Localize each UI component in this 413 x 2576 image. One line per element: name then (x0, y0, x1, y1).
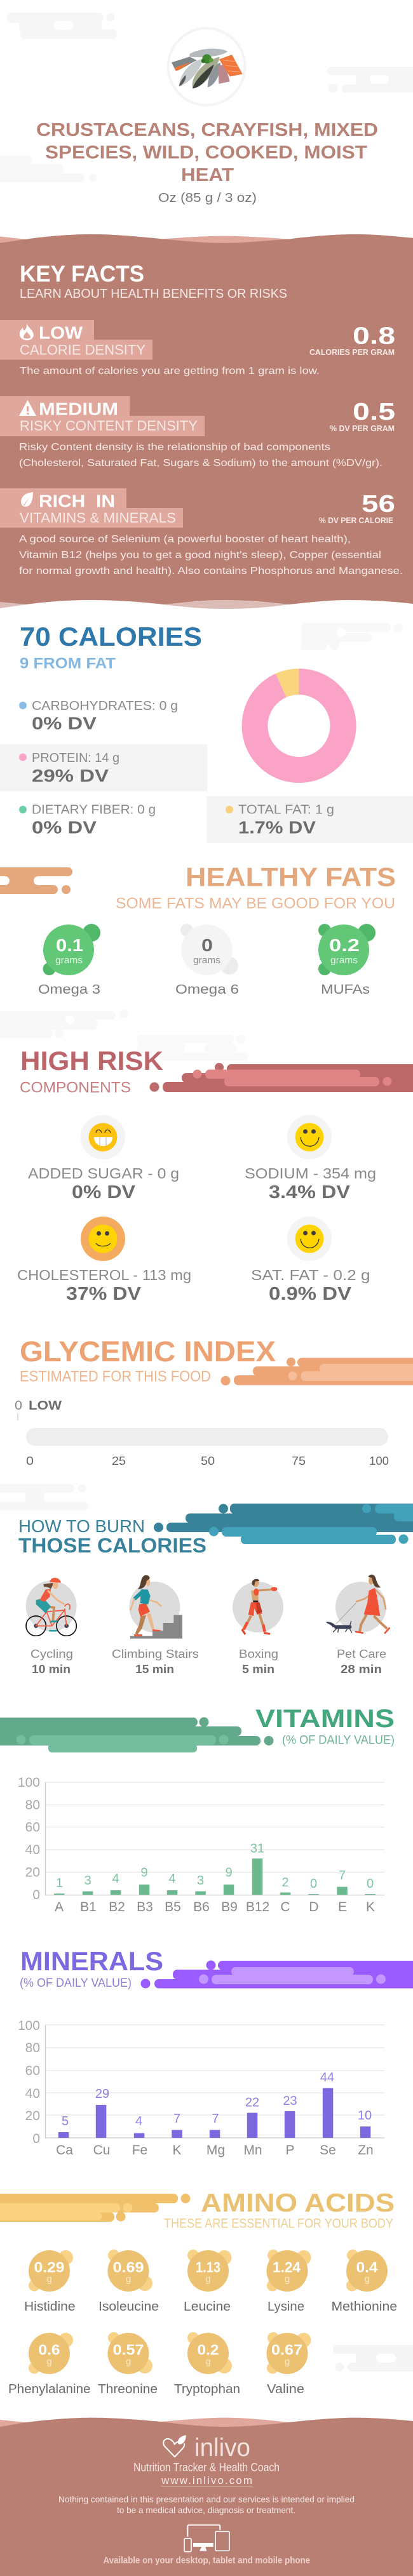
amino acid: tryptophan: g (205, 2356, 211, 2367)
bar chart: vitamins: 3 (197, 1874, 204, 1888)
risk: sodium (245, 1115, 376, 1203)
risk: cholesterol (17, 1217, 191, 1304)
amino acid: threonine (98, 2332, 158, 2396)
bar chart: minerals: P (285, 2143, 295, 2158)
fact: rich in vitamins and minerals (0, 488, 403, 577)
amino acid: threonine: g (126, 2356, 131, 2367)
subheading: vitamins: (% OF DAILY VALUE) (282, 1733, 395, 1747)
bar chart: vitamins: 4 (168, 1872, 176, 1886)
bar chart: minerals: Zn (358, 2143, 374, 2158)
decorative bars: vitamins (0, 1717, 273, 1752)
panel: key facts (0, 234, 413, 609)
macro: protein: PROTEIN: 14 g (32, 751, 119, 765)
amino acid: phenylalanine: Phenylalanine (8, 2382, 90, 2396)
amino acid: isoleucine: 0.69 (113, 2259, 144, 2276)
subheading: minerals: (% OF DAILY VALUE) (20, 1977, 132, 1990)
fact: risky content density: 0.5 (353, 399, 395, 425)
amino acid: tryptophan: Tryptophan (174, 2382, 240, 2396)
background cloud: burn (0, 1484, 88, 1511)
fat: omega 3: grams (55, 955, 83, 966)
bar chart: vitamins: B2 (109, 1900, 125, 1914)
macro: carbohydrates: CARBOHYDRATES: 0 g (32, 699, 178, 713)
logo: heart and leaf (163, 2435, 186, 2457)
background cloud: left of title (0, 156, 97, 182)
bar chart: vitamins (18, 1775, 384, 1914)
amino acid: leucine (184, 2250, 231, 2314)
amino acid: histidine: g (46, 2274, 52, 2285)
icon: dog walker (326, 1575, 389, 1633)
glycemic index gauge (15, 1399, 389, 1467)
activity: cycling (26, 1578, 77, 1676)
icon: boxer (233, 1579, 283, 1634)
bar chart: vitamins: 2 (281, 1876, 289, 1890)
subheading: components: COMPONENTS (20, 1079, 131, 1096)
risk: sodium: SODIUM - 354 mg (245, 1165, 376, 1182)
activity: climbing stairs (112, 1575, 199, 1676)
bar chart: minerals: Ca (56, 2143, 73, 2158)
risk: saturated fat: 0.9% DV (269, 1284, 352, 1304)
risk: cholesterol: 37% DV (66, 1284, 142, 1304)
bar chart: minerals: 22 (245, 2095, 259, 2109)
heading: those calories: THOSE CALORIES (18, 1534, 207, 1557)
bar chart: vitamins: 100 (18, 1775, 40, 1790)
bar chart: minerals: 60 (25, 2064, 40, 2078)
glycemic index gauge: 0 (15, 1399, 22, 1413)
macro: protein: 29% DV (32, 766, 109, 785)
icon: flame (20, 323, 34, 340)
bar chart: vitamins: C (280, 1900, 290, 1914)
title: SPECIES, WILD, COOKED, MOIST (45, 142, 367, 163)
bar chart: minerals: Cu (93, 2143, 110, 2158)
amino acid: isoleucine: g (126, 2274, 131, 2285)
website link: www.inlivo.com (161, 2474, 252, 2486)
macro: dietary fiber: 0% DV (32, 818, 97, 837)
amino acid: isoleucine: Isoleucine (98, 2300, 159, 2314)
macro: protein (0, 744, 207, 791)
title: CRUSTACEANS, CRAYFISH, MIXED (36, 120, 378, 140)
icon: warning triangle (19, 400, 36, 416)
risk: added sugar (28, 1115, 179, 1203)
amino acid: valine: 0.67 (271, 2342, 302, 2358)
glycemic index gauge: 75 (292, 1455, 306, 1467)
decorative bars: burn (154, 1504, 413, 1544)
fact: rich in vitamins and minerals: % DV PER CALORIE (319, 516, 393, 525)
macro: dietary fiber (19, 803, 156, 837)
risk: added sugar: ADDED SUGAR - 0 g (28, 1165, 179, 1182)
risk: sodium: 3.4% DV (269, 1182, 351, 1203)
bar chart: vitamins: 9 (140, 1865, 148, 1879)
amino acid: tryptophan (174, 2332, 240, 2396)
fat: MUFAs (318, 924, 376, 997)
risk: saturated fat (251, 1217, 370, 1304)
activity: pet care: 28 min (341, 1663, 382, 1676)
icon: leaf (21, 492, 33, 507)
fact: calorie density: 0.8 (353, 323, 395, 349)
fat: omega 6: Omega 6 (175, 982, 239, 997)
bar chart: minerals: 5 (62, 2114, 69, 2128)
macro: total fat (207, 796, 413, 843)
bar chart: minerals: 23 (283, 2094, 297, 2108)
glycemic index gauge: 50 (201, 1455, 215, 1467)
fact: risky content density: (Cholesterol, Saturated Fat, Sugars & Sodium) to the amount (%DV/gr). (19, 458, 383, 469)
bar chart: vitamins: 3 (84, 1874, 91, 1888)
amino acid: phenylalanine: g (46, 2356, 52, 2367)
icon: healthy fats bar (0, 867, 72, 894)
subheading: glycemic index: ESTIMATED FOR THIS FOOD (20, 1368, 211, 1385)
fat: MUFAs: grams (330, 955, 358, 966)
fact: risky content density: RISKY CONTENT DENSITY (20, 418, 198, 434)
bar chart: vitamins: 7 (339, 1869, 346, 1883)
serving size: Oz (85 g / 3 oz) (158, 191, 257, 205)
bar chart: vitamins: 9 (225, 1865, 233, 1879)
fact: calorie density: LOW (39, 323, 83, 343)
glycemic index gauge: 100 (369, 1455, 389, 1467)
icon: grinning face (89, 1123, 117, 1151)
bar chart: vitamins: 0 (310, 1877, 317, 1891)
disclaimer (58, 2494, 355, 2515)
bar chart: minerals: Mg (207, 2143, 225, 2158)
heading: amino acids: AMINO ACIDS (201, 2188, 395, 2217)
decorative bars: glycemic index (221, 1358, 413, 1385)
amino acid: lysine: 1.24 (273, 2259, 301, 2276)
bar chart: vitamins: A (55, 1900, 64, 1914)
decorative bars: amino acids (0, 2194, 191, 2222)
background cloud: top right (327, 67, 413, 93)
disclaimer: to be a medical advice, diagnosis or treatment. (117, 2505, 295, 2515)
risk: saturated fat: SAT. FAT - 0.2 g (251, 1267, 370, 1283)
subheading: key facts: LEARN ABOUT HEALTH BENEFITS OR RISKS (20, 287, 287, 301)
amino acid: lysine: g (285, 2274, 290, 2285)
icon: cyclist (26, 1578, 77, 1636)
bar chart: vitamins: 20 (25, 1865, 40, 1879)
activity: boxing: Boxing (239, 1648, 278, 1660)
activity: pet care: Pet Care (337, 1648, 386, 1660)
bar chart: vitamins: B9 (221, 1900, 238, 1914)
fact: rich in vitamins and minerals: VITAMINS & MINERALS (20, 510, 176, 526)
icon: smiling face (295, 1225, 323, 1253)
bar chart: vitamins: E (338, 1900, 347, 1914)
fat: omega 3 (38, 924, 100, 997)
icon: stair climber (129, 1575, 182, 1639)
bar chart: minerals (18, 2019, 384, 2158)
heading: healthy fats: HEALTHY FATS (186, 862, 396, 891)
icon: mild smile (89, 1225, 117, 1253)
bar chart: minerals: 7 (173, 2112, 180, 2126)
amino acid: threonine: Threonine (98, 2382, 158, 2396)
activity: cycling: Cycling (30, 1648, 73, 1660)
subheading: 9 from fat: 9 FROM FAT (20, 655, 116, 672)
amino acid: valine: g (285, 2356, 290, 2367)
macro: carbohydrates: 0% DV (32, 714, 97, 733)
heading: 70 calories: 70 CALORIES (20, 622, 202, 651)
bar chart: minerals: 10 (358, 2109, 372, 2123)
amino acid: methionine: g (364, 2274, 370, 2285)
fact: rich in vitamins and minerals: 56 (362, 491, 395, 517)
bar chart: vitamins: 1 (56, 1876, 63, 1890)
bar chart: vitamins: 31 (250, 1841, 264, 1855)
donut chart (242, 669, 356, 783)
fact: calorie density: CALORIES PER GRAM (309, 347, 395, 357)
amino acid: leucine: 1.13 (196, 2259, 220, 2276)
bar chart: minerals: 0 (32, 2132, 40, 2146)
title: HEAT (181, 165, 234, 185)
glycemic index gauge: 0 (26, 1455, 34, 1467)
amino acid: methionine (332, 2250, 397, 2314)
amino acid: phenylalanine: 0.6 (38, 2342, 60, 2358)
bar chart: minerals: 7 (212, 2112, 219, 2126)
fact: risky content density: Risky Content density is the relationship of bad components (19, 442, 330, 453)
amino acid: methionine: 0.4 (356, 2259, 378, 2276)
bar chart: vitamins: 0 (32, 1888, 40, 1902)
disclaimer: Nothing contained in this presentation and our services is intended or implied (58, 2494, 355, 2504)
activity: boxing (233, 1579, 283, 1676)
title (36, 120, 378, 185)
bar chart: vitamins: 60 (25, 1820, 40, 1835)
bar chart: vitamins: K (366, 1900, 375, 1914)
fact: calorie density (0, 320, 395, 377)
background cloud: amino acids (333, 2345, 413, 2372)
amino acid: histidine: Histidine (24, 2300, 75, 2314)
bar chart: vitamins: B12 (246, 1900, 269, 1914)
amino acid: valine: Valine (267, 2382, 304, 2396)
icon: desktop, tablet and phone (184, 2525, 229, 2552)
logo wordmark: inlivo (194, 2434, 250, 2462)
bar chart: minerals: 40 (25, 2086, 40, 2101)
bar chart: minerals: Fe (132, 2143, 147, 2158)
amino acid: lysine (267, 2250, 311, 2314)
fact: rich in vitamins and minerals: A good source of Selenium (a powerful booster of heart health), (19, 534, 351, 545)
fat: omega 3: Omega 3 (38, 982, 100, 997)
tagline: Nutrition Tracker & Health Coach (133, 2461, 280, 2474)
fat: MUFAs: 0.2 (329, 935, 360, 955)
decorative bars: high risk (150, 1063, 413, 1092)
decorative bars: minerals (141, 1961, 413, 1989)
risk: cholesterol: CHOLESTEROL - 113 mg (17, 1267, 191, 1283)
activity: climbing stairs: 15 min (135, 1663, 174, 1676)
fact: rich in vitamins and minerals: RICH IN (39, 491, 115, 511)
bar chart: minerals: 4 (135, 2114, 142, 2128)
bar chart: minerals: Se (320, 2143, 336, 2158)
amino acid: methionine: Methionine (332, 2300, 397, 2314)
fat: MUFAs: MUFAs (321, 982, 370, 997)
heading: vitamins: VITAMINS (255, 1705, 395, 1733)
glycemic index gauge: 25 (112, 1455, 126, 1467)
bar chart: minerals: 100 (18, 2019, 40, 2033)
macro: total fat: TOTAL FAT: 1 g (238, 803, 334, 817)
amino acid: isoleucine (98, 2250, 159, 2314)
bar chart: vitamins: 80 (25, 1798, 40, 1812)
amino acid: histidine (24, 2250, 75, 2314)
macro: carbohydrates (19, 699, 178, 733)
activity: climbing stairs: Climbing Stairs (112, 1648, 199, 1660)
panel: footer (0, 2418, 413, 2576)
availability note: Available on your desktop, tablet and mobile phone (103, 2555, 310, 2566)
subheading: healthy fats: SOME FATS MAY BE GOOD FOR YOU (116, 895, 395, 912)
bar chart: minerals: Mn (243, 2143, 262, 2158)
fact: rich in vitamins and minerals: Vitamin B12 (helps you to get a good night's sleep), Copper (essential (19, 550, 381, 561)
bar chart: minerals: 29 (95, 2087, 109, 2101)
glycemic index gauge: LOW (29, 1399, 62, 1413)
bar chart: vitamins: 4 (112, 1872, 119, 1886)
fact: risky content density (0, 396, 395, 469)
fact: calorie density: The amount of calories you are getting from 1 gram is low. (20, 366, 320, 377)
amino acid: threonine: 0.57 (113, 2342, 144, 2358)
bar chart: minerals: 44 (320, 2071, 334, 2085)
bar chart: vitamins: D (309, 1900, 319, 1914)
activity: boxing: 5 min (242, 1663, 274, 1676)
macro: dietary fiber: DIETARY FIBER: 0 g (32, 803, 156, 817)
bar chart: minerals: 80 (25, 2041, 40, 2055)
amino acid: histidine: 0.29 (34, 2259, 65, 2276)
fact: rich in vitamins and minerals: for normal growth and health). Also contains Phosphorus and Manganese. (19, 566, 403, 577)
background cloud: top left (7, 13, 117, 39)
bar chart: vitamins: B5 (165, 1900, 181, 1914)
fat: omega 3: 0.1 (56, 935, 83, 955)
activity: pet care (326, 1575, 389, 1676)
fat: omega 6 (175, 924, 239, 997)
amino acid: lysine: Lysine (267, 2300, 304, 2314)
background cloud: calories (301, 623, 403, 650)
macro: total fat: 1.7% DV (238, 818, 316, 837)
icon: smiling face (295, 1123, 323, 1151)
fat: omega 6: 0 (201, 935, 213, 955)
heading: key facts: KEY FACTS (20, 260, 144, 287)
food image in ring (168, 28, 245, 105)
amino acid: leucine: Leucine (184, 2300, 231, 2314)
heading: high risk: HIGH RISK (20, 1046, 163, 1076)
background cloud: high risk (137, 1035, 248, 1061)
bar chart: vitamins: B3 (137, 1900, 153, 1914)
amino acid: valine (267, 2332, 311, 2396)
fact: calorie density: CALORIE DENSITY (20, 342, 146, 358)
fact: risky content density: % DV PER GRAM (330, 424, 395, 433)
fact: risky content density: MEDIUM (39, 399, 118, 419)
risk: added sugar: 0% DV (72, 1182, 136, 1203)
bar chart: vitamins: 0 (367, 1877, 374, 1891)
heading: how to burn: HOW TO BURN (18, 1516, 145, 1536)
bar chart: vitamins: B6 (193, 1900, 210, 1914)
bar chart: vitamins: 40 (25, 1843, 40, 1857)
background cloud: mid left (0, 1010, 128, 1038)
bar chart: vitamins: B1 (80, 1900, 97, 1914)
activity: cycling: 10 min (32, 1663, 71, 1676)
bar chart: minerals: K (172, 2143, 182, 2158)
heading: minerals: MINERALS (20, 1946, 163, 1976)
amino acid: leucine: g (205, 2274, 211, 2285)
heading: glycemic index: GLYCEMIC INDEX (20, 1335, 276, 1368)
amino acid: tryptophan: 0.2 (197, 2342, 219, 2358)
amino acid: phenylalanine (8, 2333, 90, 2396)
bar chart: minerals: 20 (25, 2109, 40, 2123)
fat: omega 6: grams (193, 955, 220, 966)
